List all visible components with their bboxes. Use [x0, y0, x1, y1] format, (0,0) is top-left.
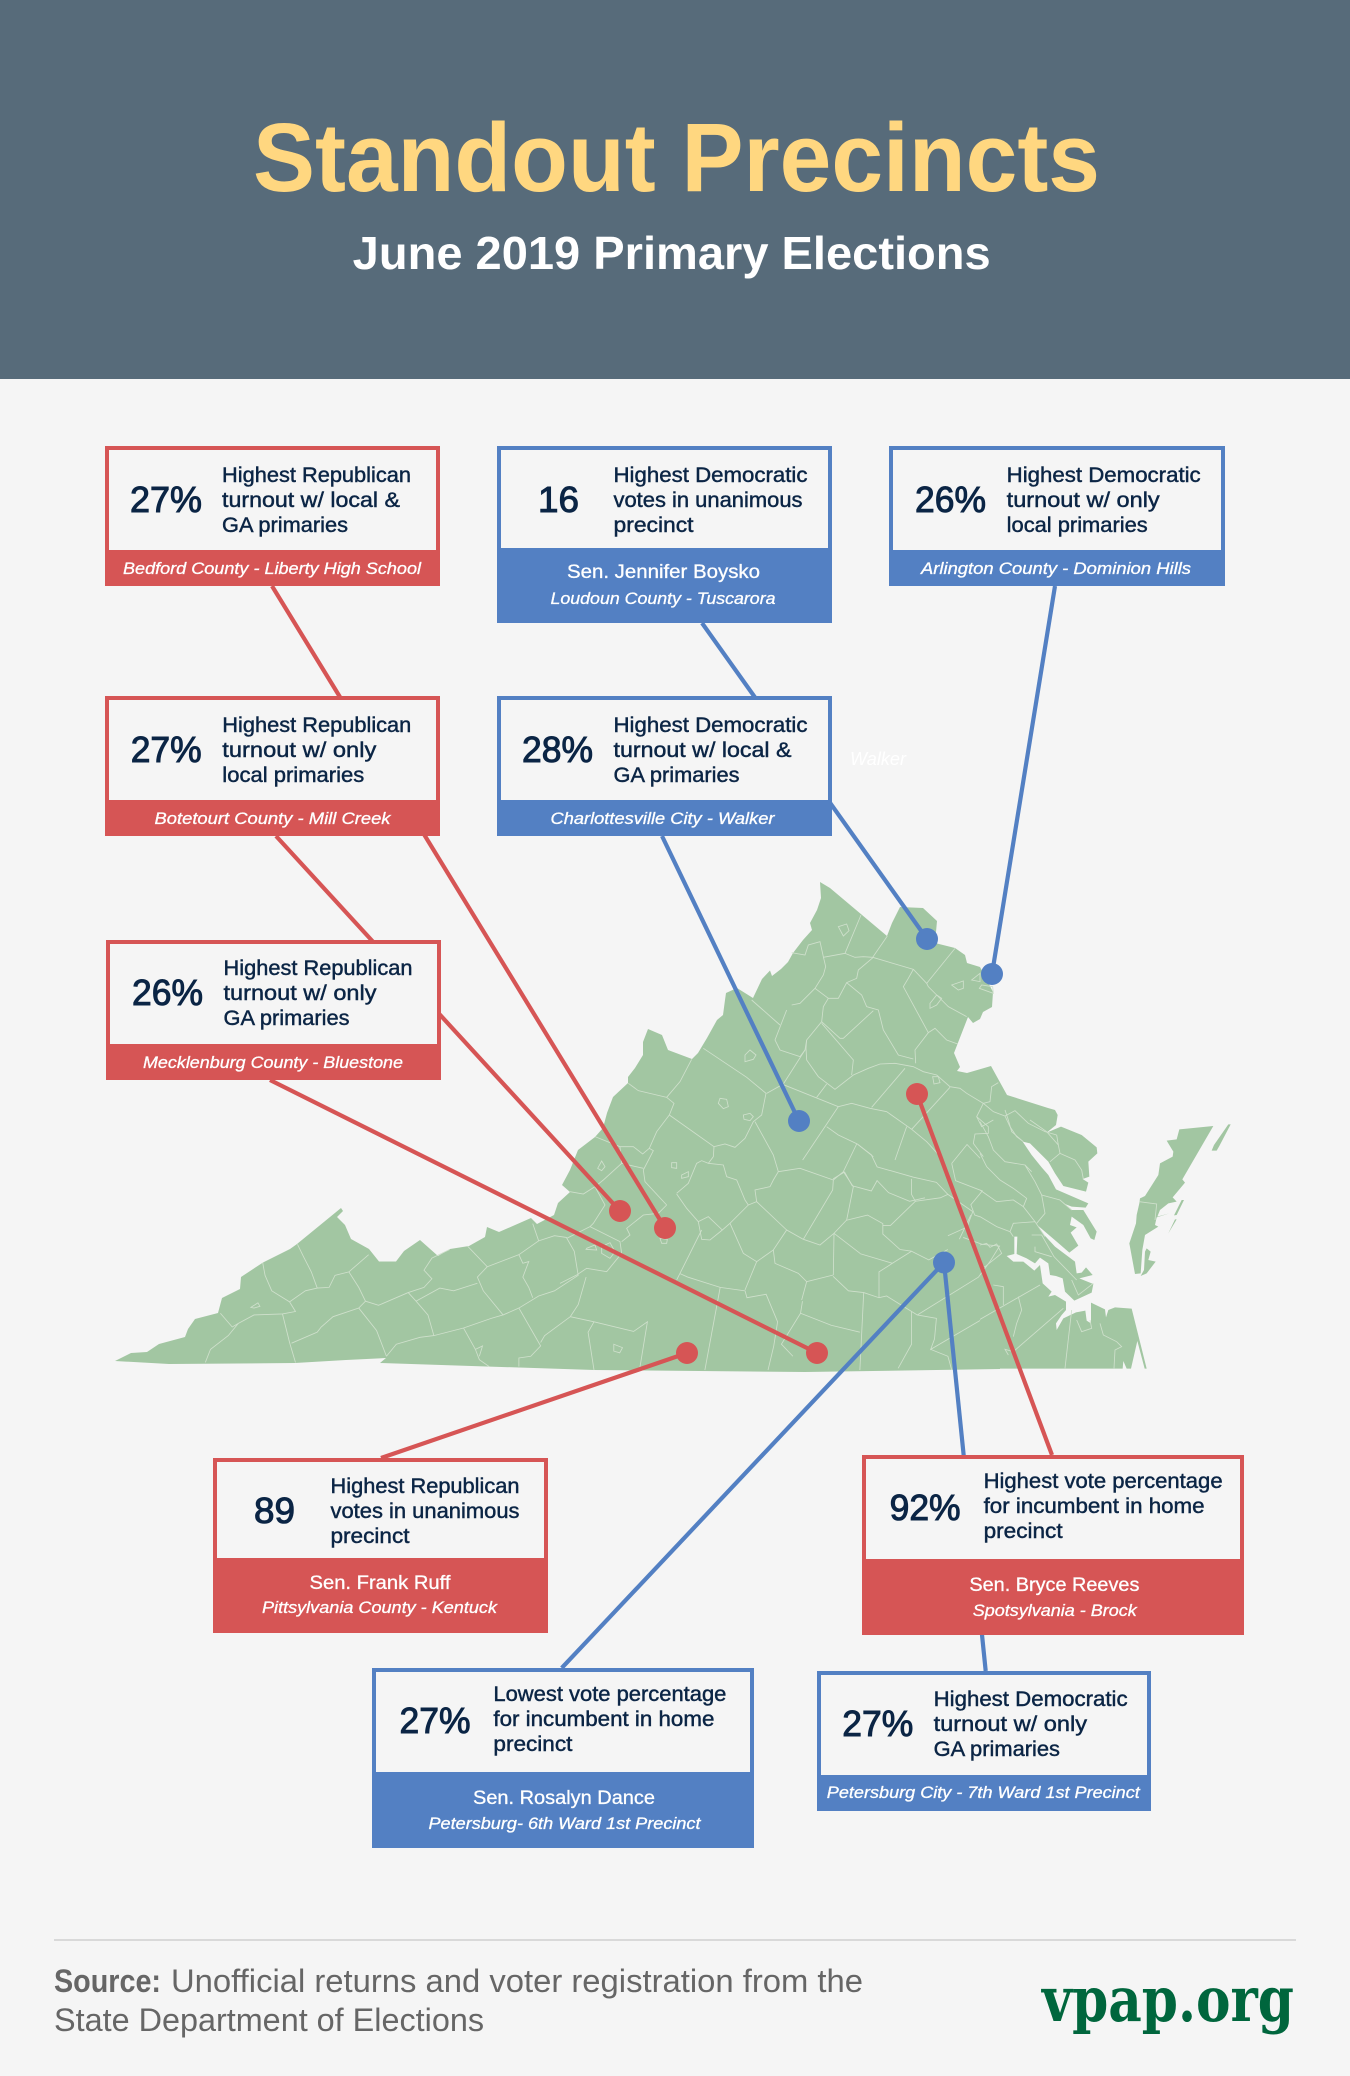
map: Virginia counties	[115, 882, 1231, 1372]
description: votes in unanimous	[330, 1500, 520, 1523]
description: turnout w/ local &	[222, 489, 400, 512]
description: Highest Republican	[222, 464, 411, 487]
location: Botetourt County - Mill Creek	[154, 809, 392, 828]
description: turnout w/ only	[222, 739, 377, 762]
connector: Loudoun County to Loudoun dot	[702, 623, 927, 939]
source text: Unofficial returns and voter registration from the	[171, 1963, 863, 1999]
connector: Charlottesville City to Charlottesville dot	[662, 836, 799, 1121]
panel: Pittsylvania County	[213, 1458, 548, 1633]
panel: Mecklenburg County	[106, 940, 441, 1080]
source text: State Department of Elections	[54, 2002, 484, 2038]
logo: vpap.org: vpap.org	[1040, 1963, 1294, 2036]
location: Pittsylvania County - Kentuck	[262, 1598, 499, 1617]
description	[330, 1475, 520, 1548]
connector: Pittsylvania County to Pittsylvania dot	[381, 1353, 687, 1458]
location: Petersburg- 6th Ward 1st Precinct	[428, 1814, 702, 1833]
eastern shore	[1129, 1126, 1213, 1274]
panel: Charlottesville City	[497, 696, 832, 836]
connector: Mecklenburg County to Mecklenburg dot	[270, 1080, 817, 1353]
connector: Spotsylvania to Spotsylvania dot	[917, 1094, 1052, 1455]
description: votes in unanimous	[614, 489, 802, 512]
description: Highest Democratic	[934, 1688, 1128, 1711]
description: Highest Democratic	[1007, 464, 1201, 487]
description: Highest Republican	[224, 957, 412, 980]
description: turnout w/ only	[934, 1713, 1088, 1736]
stat: 27%	[130, 479, 202, 520]
description: turnout w/ only	[1007, 489, 1160, 512]
map dots: precinct locations	[609, 928, 1003, 1364]
location: Spotsylvania - Brock	[973, 1601, 1138, 1620]
description: for incumbent in home	[984, 1495, 1205, 1518]
description	[222, 714, 411, 787]
description: precinct	[330, 1525, 410, 1548]
source text	[54, 1963, 863, 2038]
description: for incumbent in home	[493, 1708, 714, 1731]
stat: 27%	[842, 1703, 913, 1744]
description	[493, 1683, 726, 1756]
senator: Sen. Rosalyn Dance	[473, 1787, 655, 1809]
description: GA primaries	[934, 1738, 1060, 1761]
ghost label: Walker: Walker	[850, 749, 907, 769]
description: precinct	[984, 1520, 1063, 1543]
description: GA primaries	[222, 514, 348, 537]
panel: Petersburg 6th Ward	[372, 1668, 754, 1848]
connector: Arlington County to Arlington dot	[992, 586, 1055, 974]
stat: 28%	[522, 729, 593, 770]
senator: Sen. Bryce Reeves	[969, 1574, 1140, 1596]
connector: Petersburg 7th Ward to Petersburg dot	[944, 1262, 986, 1671]
description: local primaries	[222, 764, 364, 787]
title: Standout Precincts	[253, 103, 1100, 212]
stat: 26%	[915, 479, 986, 520]
description	[984, 1470, 1223, 1543]
panel: Botetourt County	[105, 696, 440, 836]
stat: 92%	[890, 1487, 961, 1528]
description: GA primaries	[224, 1007, 350, 1030]
senator: Sen. Jennifer Boysko	[567, 561, 760, 583]
description: local primaries	[1007, 514, 1148, 537]
location: Loudoun County - Tuscarora	[550, 589, 776, 608]
description: turnout w/ local &	[614, 739, 792, 762]
connector: Bedford County to Bedford dot	[272, 586, 665, 1228]
description: turnout w/ only	[224, 982, 377, 1005]
description: Highest Democratic	[614, 714, 808, 737]
description	[614, 714, 808, 787]
description: Highest vote percentage	[984, 1470, 1223, 1493]
connector: Botetourt County to Botetourt dot	[276, 836, 620, 1211]
location: Charlottesville City - Walker	[550, 809, 776, 828]
panel: Spotsylvania	[862, 1455, 1244, 1635]
panel: Bedford County	[105, 446, 440, 586]
stat: 26%	[132, 972, 203, 1013]
connector: Petersburg 6th Ward to Petersburg dot	[562, 1262, 944, 1668]
location: Mecklenburg County - Bluestone	[143, 1053, 403, 1072]
stat: 27%	[131, 729, 202, 770]
description	[934, 1688, 1128, 1761]
source text: Source:	[54, 1963, 161, 1999]
location: Bedford County - Liberty High School	[123, 559, 422, 578]
description: precinct	[493, 1733, 573, 1756]
description	[1007, 464, 1201, 537]
description: Highest Republican	[222, 714, 411, 737]
senator: Sen. Frank Ruff	[310, 1572, 451, 1594]
stat: 89	[254, 1490, 295, 1531]
stat: 27%	[400, 1700, 470, 1741]
panel: Loudoun County	[497, 446, 832, 623]
location: Petersburg City - 7th Ward 1st Precinct	[827, 1783, 1141, 1802]
description: Lowest vote percentage	[493, 1683, 726, 1706]
panel: Petersburg 7th Ward	[817, 1671, 1151, 1811]
subtitle: June 2019 Primary Elections	[353, 227, 991, 279]
panel: Arlington County	[889, 446, 1225, 586]
description: Highest Republican	[330, 1475, 520, 1498]
header band	[0, 0, 1350, 379]
description: precinct	[614, 514, 694, 537]
description	[614, 464, 808, 537]
footer	[54, 1939, 1296, 2038]
description	[222, 464, 411, 537]
description	[224, 957, 412, 1030]
description: GA primaries	[614, 764, 740, 787]
location: Arlington County - Dominion Hills	[920, 559, 1192, 578]
description: Highest Democratic	[614, 464, 808, 487]
stat: 16	[538, 479, 579, 520]
